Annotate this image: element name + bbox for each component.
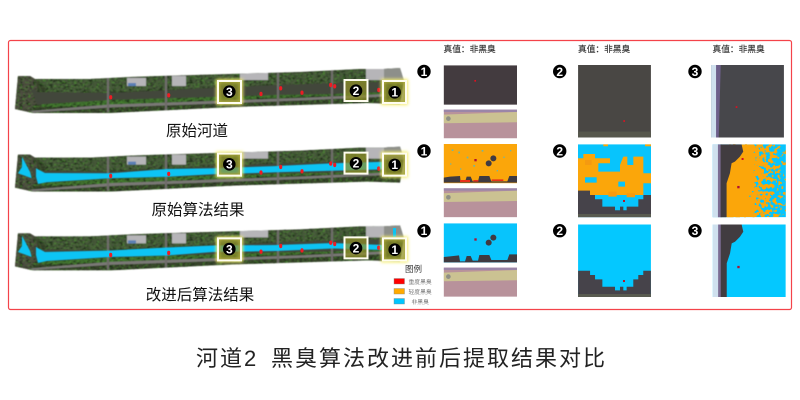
caption: original algorithm result: 原始算法结果 [151,200,245,219]
legend: 图例 [405,264,422,274]
legend [394,264,432,306]
column labels: true value: 真值：非黑臭 [444,43,496,54]
number markers: 3 [692,144,699,158]
patch: row 3 site 1 [444,223,517,297]
number markers: 1 [421,224,428,238]
panel: comparison frame [8,40,792,310]
number markers: 3 [692,224,699,238]
legend: 非黑臭 [412,298,429,306]
patch: row 3 site 2 [578,224,651,297]
number markers: 1 [421,144,428,158]
patch: row 2 site 1 [444,144,517,218]
caption: improved algorithm result: 改进后算法结果 [146,285,254,304]
number markers: 1 [421,65,428,79]
legend: 重度黑臭 [408,278,432,286]
legend: 轻度黑臭 [408,288,432,296]
patch: row 1 site 3 [711,65,784,138]
strip: original river [10,65,410,115]
title: 河道2 [196,346,258,371]
number markers: 2 [556,224,563,238]
patch: row 3 site 3 [712,224,786,297]
strip: original algorithm result [10,144,410,194]
column labels: true value: 真值：非黑臭 [712,43,765,54]
patch: row 2 site 3 [712,144,786,218]
column labels: true value [444,43,765,54]
patch: row 1 site 1 [444,65,517,138]
number markers: 2 [556,65,563,79]
column labels: true value: 真值：非黑臭 [578,43,630,54]
patch: row 1 site 2 [578,65,651,138]
caption: original river: 原始河道 [166,122,228,140]
number markers: 3 [692,65,699,79]
title: 黑臭算法改进前后提取结果对比 [271,346,607,371]
patch: row 2 site 2 [578,144,651,218]
strip: improved algorithm result [10,222,410,272]
number markers: 2 [556,144,563,158]
number markers [417,65,702,238]
